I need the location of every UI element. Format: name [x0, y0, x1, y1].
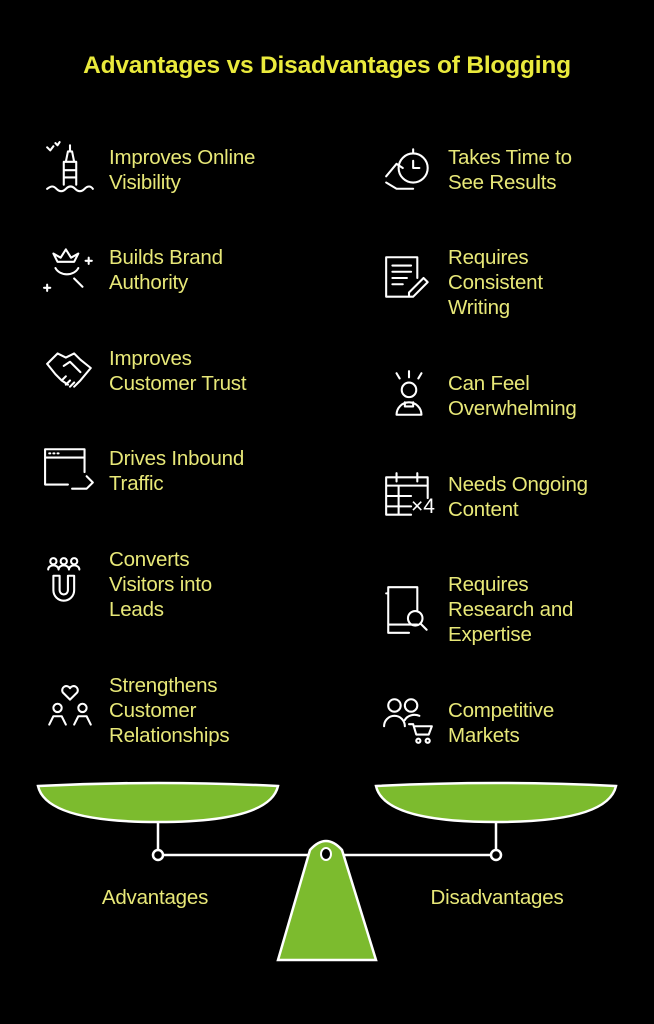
icon: lighthouse — [46, 141, 94, 192]
text: Drives Inbound Traffic — [109, 447, 244, 495]
text: Requires Research and Expertise: Expertise — [448, 623, 532, 646]
text: ×4 — [411, 495, 435, 518]
text: Converts Visitors into Leads: Converts — [109, 548, 189, 571]
text: Converts Visitors into Leads — [109, 548, 212, 621]
right pan — [376, 783, 616, 822]
text: Needs Ongoing Content — [448, 473, 588, 521]
icon: stopwatch hand — [385, 148, 429, 190]
text: Takes Time to See Results: Takes Time to — [448, 146, 572, 169]
text: Needs Ongoing Content: Needs Ongoing — [448, 473, 588, 496]
text: Can Feel Overwhelming: Can Feel — [448, 372, 530, 395]
text: Improves Online Visibility: Visibility — [109, 171, 181, 194]
icon: people cart — [383, 698, 433, 744]
icon: book magnifier — [385, 586, 428, 634]
icon: magnet people — [47, 557, 80, 602]
text: Improves Customer Trust — [109, 347, 246, 395]
text: Improves Online Visibility — [109, 146, 255, 194]
text: Strengthens Customer Relationships: Customer — [109, 699, 196, 722]
text: Converts Visitors into Leads: Visitors into — [109, 573, 212, 596]
text: Can Feel Overwhelming: Overwhelming — [448, 397, 577, 420]
text: Builds Brand Authority — [109, 246, 223, 294]
label: Disadvantages: Disadvantages — [430, 886, 564, 909]
icon: handshake — [46, 352, 92, 388]
text: Requires Research and Expertise: Requires — [448, 573, 528, 596]
text: Competitive Markets: Competitive — [448, 699, 554, 722]
fulcrum — [278, 841, 376, 960]
left pan — [38, 783, 278, 822]
icon: calendar x4 — [385, 472, 429, 516]
text: Competitive Markets: Markets — [448, 724, 520, 747]
text: Improves Customer Trust: Improves — [109, 347, 192, 370]
text: Strengthens Customer Relationships — [109, 674, 229, 747]
text: Requires Research and Expertise: Research and — [448, 598, 573, 621]
text: Needs Ongoing Content: Content — [448, 498, 518, 521]
text: Builds Brand Authority: Builds Brand — [109, 246, 223, 269]
text: Strengthens Customer Relationships: Strengthens — [109, 674, 217, 697]
text: Can Feel Overwhelming — [448, 372, 577, 420]
text: Improves Customer Trust: Customer Trust — [109, 372, 246, 395]
text: Converts Visitors into Leads: Leads — [109, 598, 164, 621]
balance scale — [36, 782, 618, 962]
title: Advantages vs Disadvantages of Blogging — [83, 52, 571, 79]
icon: crown magnifier — [43, 248, 93, 292]
text: Requires Consistent Writing: Writing — [448, 296, 510, 319]
text: Takes Time to See Results: See Results — [448, 171, 556, 194]
text: Strengthens Customer Relationships: Relationships — [109, 724, 229, 747]
icon: heart people — [48, 685, 92, 726]
text: Improves Online Visibility: Improves Online — [109, 146, 255, 169]
text: Takes Time to See Results — [448, 146, 572, 194]
text: Requires Research and Expertise — [448, 573, 573, 646]
text: Competitive Markets — [448, 699, 554, 747]
label: Advantages: Advantages — [102, 886, 208, 909]
text: Builds Brand Authority: Authority — [109, 271, 188, 294]
text: Drives Inbound Traffic: Drives Inbound — [109, 447, 244, 470]
icon: document pen — [385, 256, 429, 298]
text: Requires Consistent Writing: Requires — [448, 246, 528, 269]
text: Requires Consistent Writing: Consistent — [448, 271, 543, 294]
text: Drives Inbound Traffic: Traffic — [109, 472, 163, 495]
icon: stressed person — [395, 370, 422, 416]
icon: browser arrow — [44, 448, 94, 490]
text: Requires Consistent Writing — [448, 246, 543, 319]
